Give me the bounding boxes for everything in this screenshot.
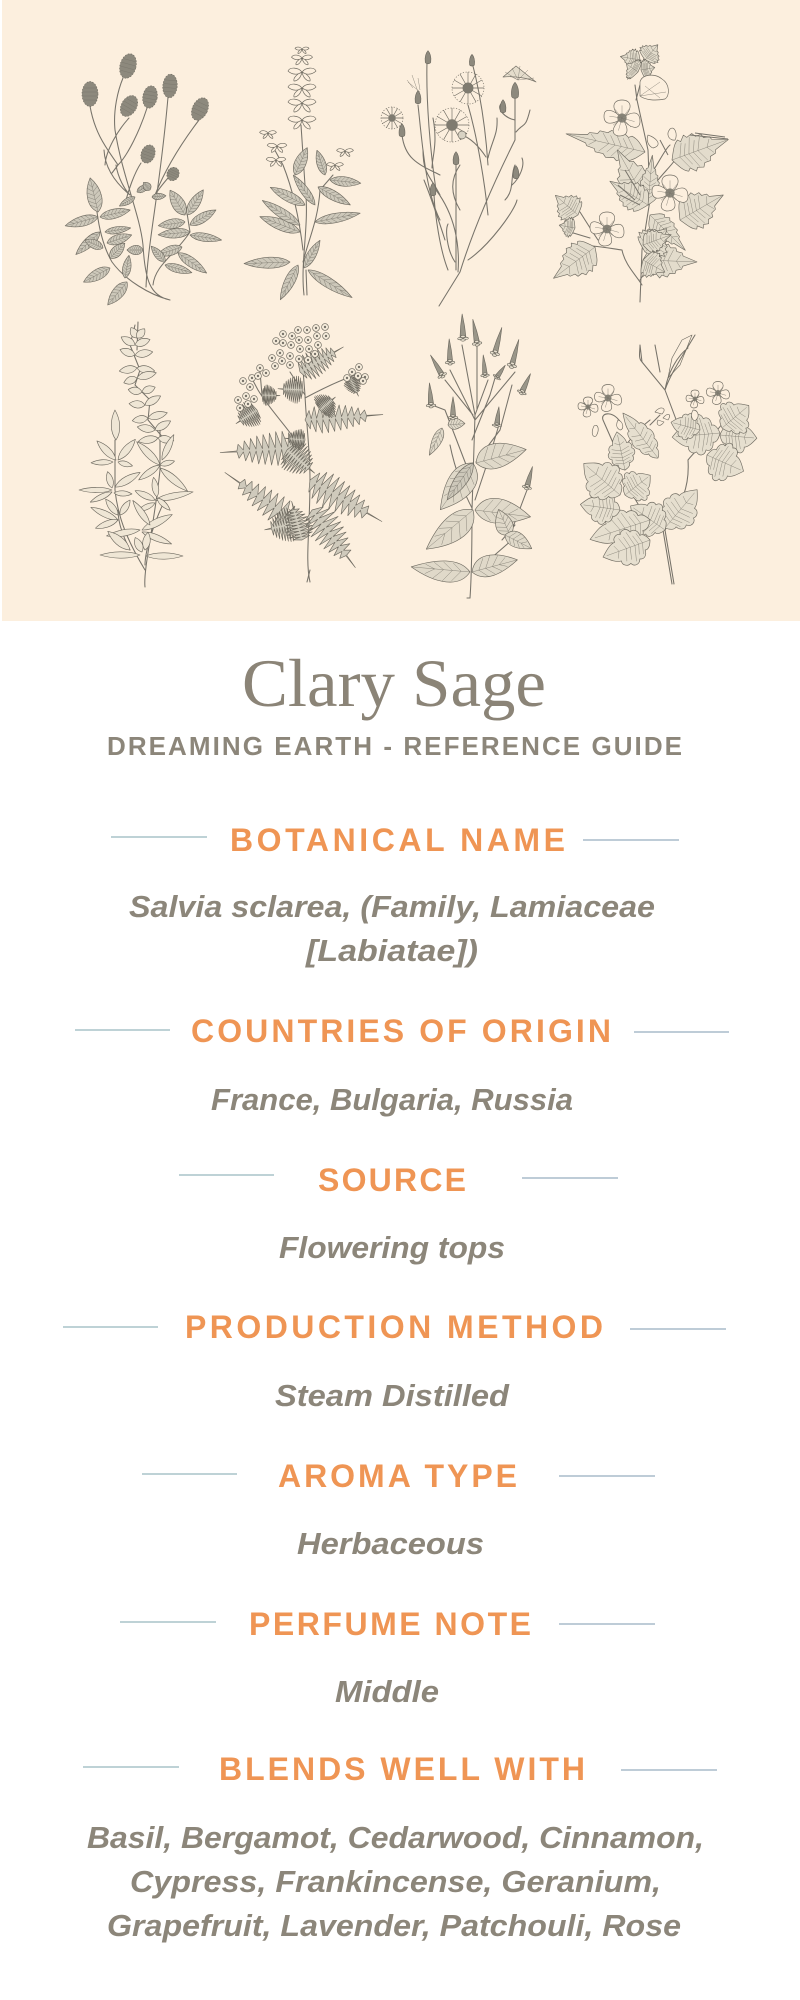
value: botanical name: Salvia sclarea, (Family, Lamiaceae [129, 889, 655, 924]
section: source [179, 1162, 618, 1265]
section: perfume note [120, 1606, 655, 1709]
value: production method: Steam Distilled [275, 1378, 510, 1413]
illustration: tansy plant [217, 324, 390, 582]
section: blends well with [83, 1751, 717, 1943]
value: countries of origin: France, Bulgaria, Russia [211, 1082, 573, 1117]
title: Clary Sage [242, 645, 546, 721]
illustration: celandine plant [570, 335, 761, 584]
value: blends well with: Basil, Bergamot, Cedarwood, Cinnamon, [87, 1820, 704, 1855]
value: botanical name [129, 889, 655, 968]
illustration: vervain plant [410, 314, 537, 598]
illustration: sage plant [244, 47, 361, 302]
subtitle: DREAMING EARTH - REFERENCE GUIDE [107, 731, 682, 761]
panel: botanical illustrations [2, 0, 800, 621]
heading: production method: PRODUCTION METHOD [185, 1309, 603, 1345]
illustration: burnet plant [64, 52, 222, 309]
value: blends well with [87, 1820, 704, 1943]
section: aroma type [142, 1458, 655, 1561]
section: botanical name [111, 822, 679, 968]
heading: aroma type: AROMA TYPE [278, 1458, 517, 1494]
heading: botanical name: BOTANICAL NAME [230, 822, 565, 858]
section: production method [63, 1309, 726, 1413]
section: countries of origin [75, 1013, 729, 1117]
illustration: savory plant [79, 322, 194, 587]
heading: perfume note: PERFUME NOTE [249, 1606, 531, 1642]
value: botanical name: [Labiatae]) [305, 933, 478, 968]
value: source: Flowering tops [279, 1230, 505, 1265]
illustration: mallow plant [543, 37, 735, 302]
heading: source: SOURCE [318, 1162, 466, 1198]
value: perfume note: Middle [335, 1674, 439, 1709]
heading: countries of origin: COUNTRIES OF ORIGIN [191, 1013, 611, 1049]
value: blends well with: Grapefruit, Lavender, Patchouli, Rose [107, 1908, 681, 1943]
heading: blends well with: BLENDS WELL WITH [219, 1751, 585, 1787]
value: aroma type: Herbaceous [297, 1526, 484, 1561]
illustration: cornflower plant [381, 51, 536, 306]
value: blends well with: Cypress, Frankincense, Geranium, [130, 1864, 661, 1899]
